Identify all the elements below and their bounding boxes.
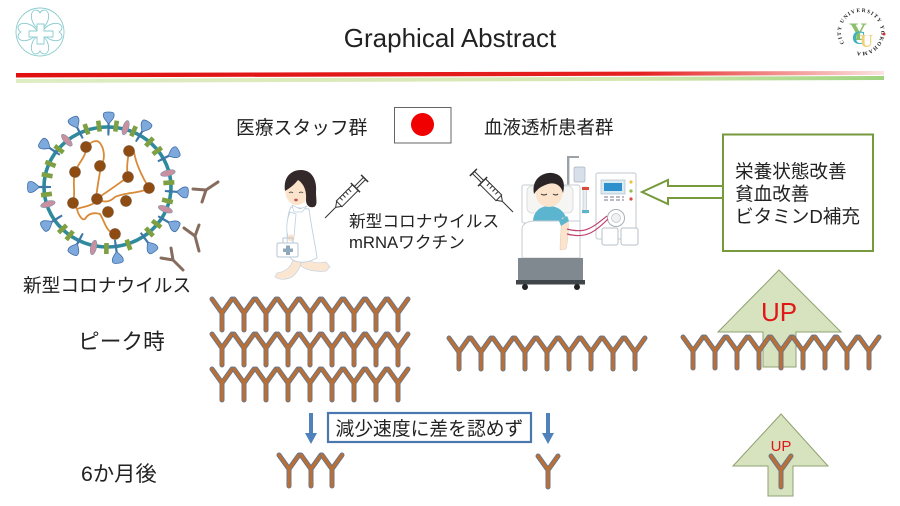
up arrow: six months bbox=[733, 414, 828, 496]
IV stand bbox=[567, 156, 589, 213]
virus surface proteins bbox=[28, 112, 189, 264]
viral RNA strand bbox=[73, 141, 149, 234]
logo: university seal: U bbox=[860, 31, 873, 51]
label: vaccine: mRNAワクチン bbox=[349, 233, 465, 252]
callout: arrow to patient bbox=[642, 180, 723, 204]
patient head bbox=[536, 179, 562, 207]
callout: nutrition, anemia, vitamin D: ビタミンD補充 bbox=[735, 206, 860, 227]
logo: university seal: C bbox=[852, 28, 866, 49]
callout: nutrition, anemia, vitamin D: 栄養状態改善 bbox=[735, 161, 847, 182]
label: virus: 新型コロナウイルス bbox=[23, 275, 191, 296]
icon: dialysis patient bbox=[516, 156, 638, 290]
blanket bbox=[522, 221, 580, 258]
up arrow: six months: UP bbox=[771, 438, 791, 455]
logo: university seal: Y bbox=[849, 19, 867, 46]
logo: left clover cross emblem bbox=[16, 8, 64, 56]
antibodies: patient group at peak bbox=[449, 338, 645, 369]
icon: nurse bbox=[275, 170, 330, 279]
bed headboard bbox=[522, 185, 580, 223]
antibodies: staff group at peak bbox=[212, 299, 408, 400]
up arrow: peak bbox=[718, 270, 841, 367]
blood tubing bbox=[567, 216, 608, 236]
label: peak: ピーク時 bbox=[78, 329, 165, 354]
header rule bbox=[16, 71, 884, 83]
title: Graphical Abstract bbox=[344, 23, 557, 53]
antibodies: staff group at six months bbox=[279, 455, 342, 486]
icon: syringe right bbox=[469, 168, 518, 217]
virus envelope bbox=[44, 127, 171, 247]
patient torso bbox=[533, 206, 567, 222]
callout: nutrition, anemia, vitamin D: 貧血改善 bbox=[735, 184, 809, 204]
antibodies: improved patients at peak bbox=[683, 337, 879, 368]
antibodies binding the virus bbox=[161, 182, 218, 270]
down arrow: staff bbox=[305, 413, 317, 444]
down arrow: patients bbox=[542, 413, 554, 444]
label: dialysis patient group: 血液透析患者群 bbox=[484, 117, 614, 138]
dialysis machine bbox=[596, 173, 636, 239]
up arrow: peak: UP bbox=[761, 297, 797, 327]
label: six months later: 6か月後 bbox=[81, 462, 157, 486]
icon: Japanese flag bbox=[394, 108, 451, 143]
callout: nutrition, anemia, vitamin D bbox=[723, 134, 873, 251]
label: vaccine: 新型コロナウイルス bbox=[349, 212, 499, 231]
label: medical staff group: 医療スタッフ群 bbox=[236, 117, 368, 138]
callout: no difference in decline rate bbox=[328, 413, 531, 442]
logo: university seal: CITY UNIVERSITY YOKOHAMA bbox=[837, 8, 884, 56]
virus illustration bbox=[28, 112, 218, 270]
arm bbox=[560, 217, 568, 250]
antibodies: patient group at six months bbox=[538, 456, 558, 487]
viral nucleoproteins bbox=[67, 141, 155, 240]
label: vaccine bbox=[349, 212, 499, 252]
bed base bbox=[518, 258, 583, 280]
icon: syringe left bbox=[320, 174, 369, 223]
callout: no difference in decline rate: 減少速度に差を認めず bbox=[336, 418, 523, 439]
